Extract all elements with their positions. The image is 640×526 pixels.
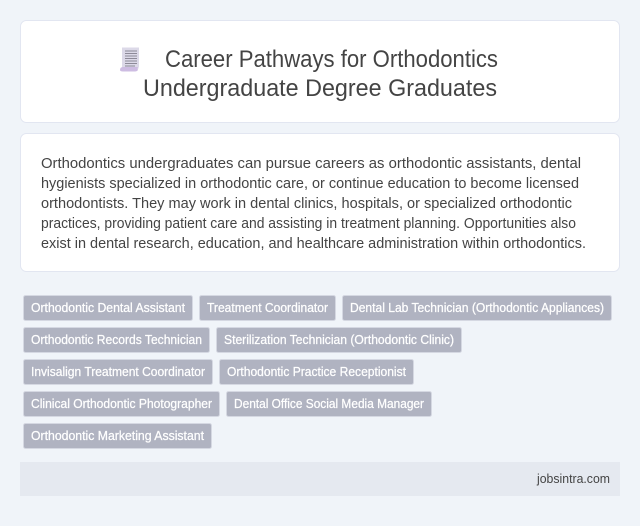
tag: [200, 296, 336, 320]
text block: description: [41, 156, 586, 252]
tag: [24, 392, 220, 416]
tag: Sterilization Technician (Orthodontic Clinic): [224, 333, 454, 347]
tag: [24, 360, 212, 384]
tag: [226, 392, 432, 416]
panel: title header: [20, 20, 620, 122]
title: [143, 46, 498, 102]
icon: document scroll: [120, 48, 139, 72]
footer source: jobsintra.com: [536, 472, 610, 486]
text block: description: practices, providing patient care and assisting in treatment planning. Opportunities also: [41, 216, 576, 232]
tag: [24, 328, 210, 352]
tag: Dental Office Social Media Manager: [234, 397, 424, 411]
tag: Orthodontic Practice Receptionist: [227, 365, 406, 379]
tag: [342, 296, 612, 320]
text block: description: Orthodontics undergraduates can pursue careers as orthodontic assistants, dental: [41, 156, 581, 172]
tag list: career pathways: [24, 296, 612, 448]
tag: Orthodontic Records Technician: [31, 333, 202, 347]
title: Career Pathways for Orthodontics: [165, 46, 498, 73]
tag: [24, 424, 212, 448]
tag: Dental Lab Technician (Orthodontic Appliances): [350, 301, 604, 315]
tag: [220, 360, 414, 384]
tag: Orthodontic Marketing Assistant: [31, 429, 205, 443]
text block: description: hygienists specialized in orthodontic care, or continue education to become licensed: [41, 176, 579, 192]
tag: Orthodontic Dental Assistant: [31, 301, 186, 315]
panel: description: [20, 134, 620, 272]
tag: [24, 296, 192, 320]
text block: description: orthodontists. They may work in dental clinics, hospitals, or specialized orthodontic: [41, 196, 572, 212]
tag: Clinical Orthodontic Photographer: [31, 397, 212, 411]
tag: Invisalign Treatment Coordinator: [31, 365, 205, 379]
footer bar: [20, 462, 620, 496]
title: Undergraduate Degree Graduates: [143, 75, 497, 102]
text block: description: exist in dental research, education, and healthcare administration within orthodontics.: [41, 236, 586, 252]
tag: [216, 328, 462, 352]
tag: Treatment Coordinator: [207, 301, 328, 315]
